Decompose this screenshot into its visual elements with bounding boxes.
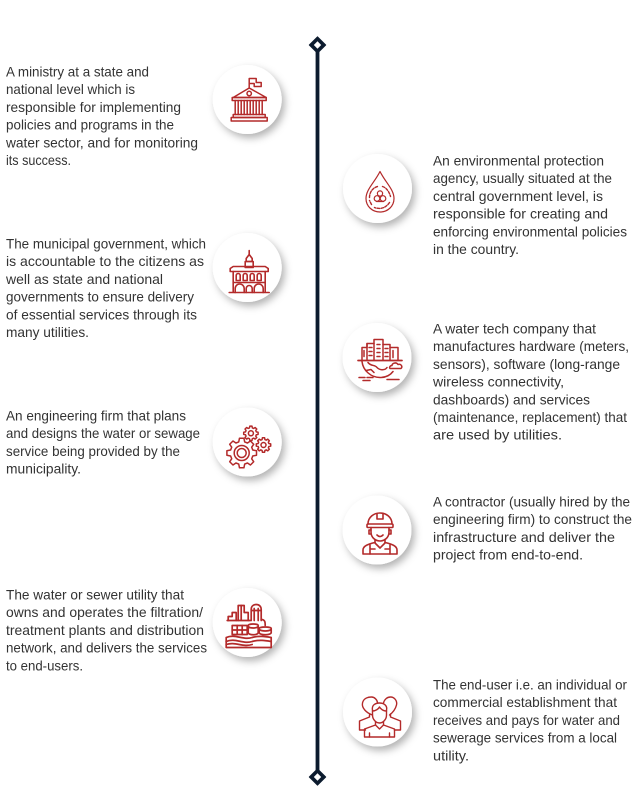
text: municipal government <box>5 236 206 340</box>
text: utility: treatment plants and distribution <box>6 623 204 638</box>
text: municipal government: governments to ensure delivery <box>6 290 194 305</box>
text: water tech company: manufactures hardware (meters, <box>433 339 629 354</box>
text: end-user: The end-user i.e. an individual or <box>433 678 627 692</box>
text: engineering firm: municipality. <box>6 462 81 477</box>
text: environmental agency: central government level, is <box>433 189 603 204</box>
text: contractor: engineering firm) to construct the <box>433 512 632 527</box>
text: water tech company: wireless connectivity, <box>432 375 564 390</box>
text: water tech company: A water tech company that <box>433 322 596 336</box>
text: environmental agency: enforcing environmental policies <box>433 224 627 239</box>
text: engineering firm <box>6 408 200 477</box>
text: contractor: infrastructure and deliver the <box>433 530 615 545</box>
icon: city on globe <box>342 323 412 392</box>
text: ministry: its success. <box>6 153 71 168</box>
icon: treatment plant <box>213 588 282 657</box>
text: water tech company: are used by utilities. <box>433 428 562 443</box>
text: ministry: responsible for implementing <box>6 100 181 115</box>
text: engineering firm: and designs the water or sewage <box>6 426 200 441</box>
text: environmental agency: agency, usually situated at the <box>433 171 612 186</box>
timeline <box>309 37 326 785</box>
icon: town hall <box>213 233 282 302</box>
text: environmental agency: responsible for creating and <box>433 207 608 222</box>
text: water tech company: dashboards) and services <box>433 392 590 407</box>
text: environmental agency: An environmental protection <box>433 154 604 168</box>
text: ministry: A ministry at a state and <box>6 64 149 80</box>
text: end-user: commercial establishment that <box>433 695 617 710</box>
text: ministry: policies and programs in the <box>6 118 174 133</box>
text: environmental agency: in the country. <box>433 242 519 257</box>
text: ministry: national level which is <box>6 82 135 97</box>
text: utility <box>6 588 207 673</box>
text: contractor <box>433 494 632 563</box>
text: utility: owns and operates the filtration/ <box>6 605 203 620</box>
text: end-user: receives and pays for water and <box>433 713 620 728</box>
text: end-user <box>433 678 627 763</box>
text: municipal government: The municipal government, which <box>6 236 206 252</box>
text: water tech company: (maintenance, replacement) that <box>433 410 627 425</box>
text: end-user: utility. <box>433 748 469 763</box>
text: utility: The water or sewer utility that <box>6 588 184 602</box>
text: water tech company <box>432 322 629 443</box>
icon: gears <box>213 408 282 476</box>
text: utility: to end-users. <box>6 658 83 673</box>
text: engineering firm: An engineering firm that plans <box>6 408 186 424</box>
text: engineering firm: service being provided by the <box>6 444 180 459</box>
text: environmental agency <box>433 154 627 257</box>
icon: government building <box>213 65 282 134</box>
text: municipal government: well as state and national <box>5 272 163 287</box>
text: municipal government: of essential services through its <box>6 307 197 322</box>
text: ministry <box>5 64 198 168</box>
icon: construction worker <box>342 496 412 564</box>
text: water tech company: sensors), software (long-range <box>433 357 620 372</box>
icon: water drop <box>343 154 412 223</box>
icon: group of people <box>343 678 412 746</box>
text: utility: network, and delivers the services <box>6 641 207 656</box>
text: municipal government: many utilities. <box>6 325 89 340</box>
text: municipal government: is accountable to the citizens as <box>6 254 204 269</box>
text: end-user: sewerage services from a local <box>433 731 617 746</box>
text: contractor: project from end-to-end. <box>433 548 583 563</box>
text: ministry: water sector, and for monitoring <box>5 135 198 150</box>
text: contractor: A contractor (usually hired by the <box>433 494 630 510</box>
